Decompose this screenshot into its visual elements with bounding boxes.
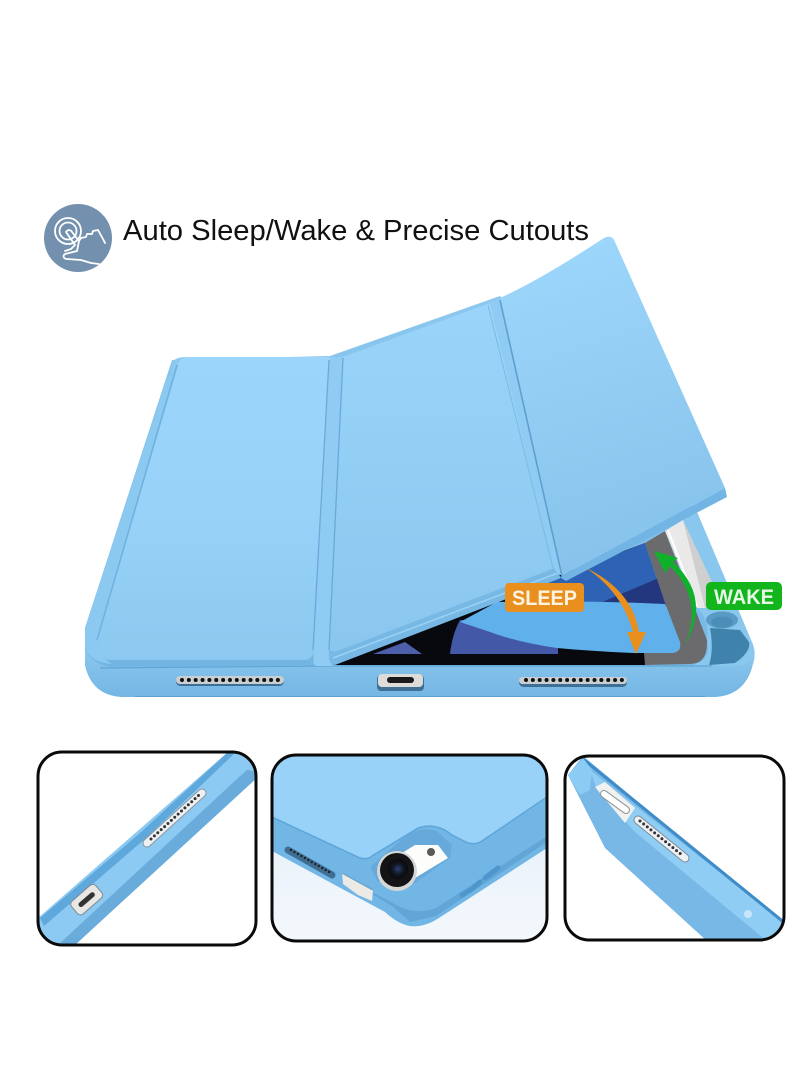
speaker right	[519, 677, 627, 687]
label: wake	[706, 582, 782, 610]
arrow: wake	[654, 551, 696, 645]
speaker left	[176, 676, 284, 686]
screen: wallpaper and bezel	[330, 531, 707, 665]
case right wall	[683, 512, 755, 682]
label: sleep: SLEEP	[512, 587, 577, 610]
left cover panel	[96, 357, 330, 660]
pencil holder	[706, 612, 749, 665]
fold: middle to right	[490, 298, 562, 576]
inset: speaker and port, left view	[30, 752, 260, 945]
apple pencil	[665, 520, 713, 608]
label: sleep	[505, 583, 584, 612]
icon: touch gesture badge	[44, 204, 112, 272]
right cover panel	[500, 237, 725, 576]
label: wake: WAKE	[714, 586, 774, 609]
inset: camera cutout corner	[272, 755, 547, 941]
port: USB-C	[377, 674, 424, 691]
fold: left to middle	[313, 357, 343, 666]
infographic canvas	[36, 204, 786, 946]
bottom lip	[85, 650, 753, 697]
tablet case illustration	[85, 237, 755, 697]
title: Auto Sleep/Wake & Precise Cutouts	[123, 215, 589, 247]
arrow: sleep	[586, 568, 646, 654]
middle cover panel	[329, 303, 555, 653]
inset: port and speaker, right view	[565, 756, 786, 942]
case shell	[85, 296, 755, 697]
